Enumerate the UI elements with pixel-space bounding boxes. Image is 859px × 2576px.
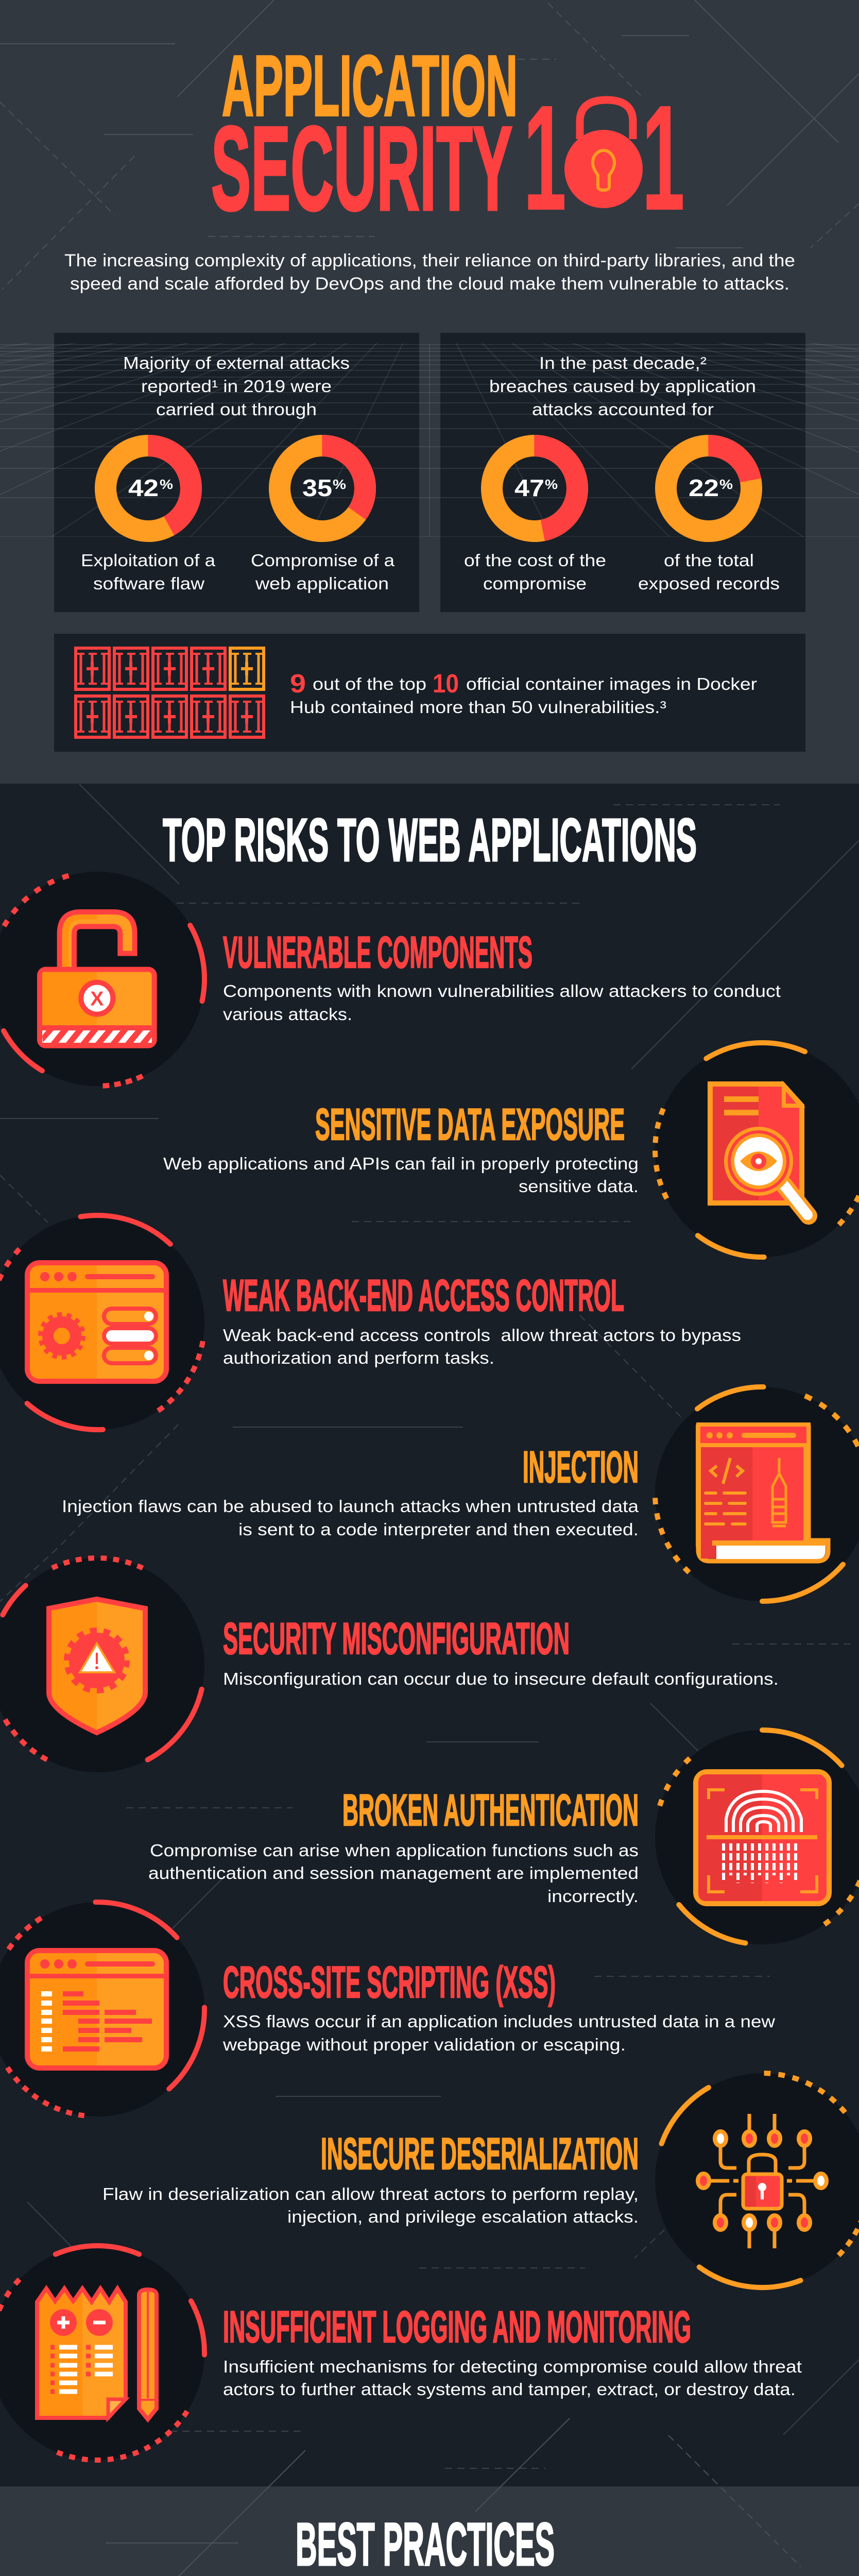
donut chart: 47%: [492, 446, 577, 531]
donut captions: software flaw: [93, 574, 204, 593]
donut captions: exposed records: [638, 574, 780, 593]
container statistic text: 9: [290, 669, 306, 698]
icon: log receipt and pencil: [0, 2205, 246, 2501]
description: XSS flaws occur if an application includes untrusted data in a new: [223, 2012, 775, 2031]
donut chart: 47%: %: [545, 477, 558, 492]
icon: code listing window: [0, 1900, 207, 2119]
donut captions: of the cost of the: [464, 551, 606, 570]
title: SECURITY: [211, 102, 512, 235]
icon: shield with warning gear: [0, 1555, 204, 1772]
description: [163, 1154, 639, 1196]
description: Flaw in deserialization can allow threat actors to perform replay,: [102, 2184, 639, 2204]
description: authentication and session management are implemented: [148, 1863, 639, 1883]
donut chart: 42%: 42: [128, 474, 159, 501]
text: panel 1 heading: reported¹ in 2019 were: [141, 377, 332, 396]
icon: open padlock: [0, 872, 207, 1089]
risk 8: insecure deserialization: [102, 2042, 859, 2319]
donut chart: 22%: %: [719, 477, 733, 492]
container statistic text: Hub contained more than 50 vulnerabilities.³: [290, 698, 666, 717]
donut captions: of the total: [664, 551, 754, 570]
title: 1: [642, 74, 685, 242]
section background: intro: [0, 0, 859, 784]
risk 9: insufficient logging and monitoring: [0, 2243, 802, 2463]
donut chart: 42%: %: [160, 477, 173, 492]
description: Compromise can arise when application functions such as: [150, 1841, 639, 1860]
description: is sent to a code interpreter and then executed.: [238, 1520, 639, 1539]
icon: padlock zero: [564, 100, 643, 208]
text: panel 1 heading: Majority of external attacks: [123, 353, 350, 372]
title: APPLICATION: [222, 38, 518, 134]
description: authorization and perform tasks.: [223, 1348, 494, 1367]
icon: circuit lock: [655, 2071, 859, 2291]
title: [211, 38, 685, 242]
risk 4: injection: [62, 1343, 859, 1646]
section background: top risks: [0, 784, 859, 2486]
risk 1: vulnerable components: VULNERABLE COMPONENTS: [223, 928, 532, 977]
description: Weak back-end access controls allow threat actors to bypass: [223, 1326, 741, 1345]
description: Insufficient mechanisms for detecting compromise could allow threat: [223, 2357, 802, 2376]
text: panel 1 heading: carried out through: [156, 400, 317, 419]
text: panel 1 heading: [123, 353, 350, 419]
description: [102, 2184, 639, 2226]
intro text: The increasing complexity of applications, their reliance on third-party libraries, and the: [64, 251, 795, 270]
description: [222, 2012, 775, 2054]
description: [223, 1326, 741, 1367]
description: [223, 981, 781, 1024]
container statistic text: official container images in Docker: [466, 674, 757, 693]
description: [148, 1841, 639, 1906]
heading: CROSS-SITE SCRIPTING (XSS): [223, 1958, 556, 2007]
risk 2: sensitive data exposure: [163, 1003, 859, 1297]
icon: open padlock: X: [90, 988, 104, 1010]
panel: containers: [54, 634, 805, 752]
donut chart: 35%: [280, 446, 365, 531]
icon: code window and syringe: [652, 1384, 859, 1604]
description: injection, and privilege escalation attacks.: [287, 2207, 639, 2226]
description: Misconfiguration can occur due to insecure default configurations.: [223, 1669, 779, 1688]
risk 5: security misconfiguration: [0, 1520, 779, 1810]
intro text: speed and scale afforded by DevOps and the cloud make them vulnerable to attacks.: [70, 274, 789, 294]
text: panel 2 heading: breaches caused by application: [489, 377, 756, 396]
donut captions: Exploitation of a: [81, 551, 216, 570]
donut chart: 35%: %: [333, 477, 346, 492]
text: panel 2 heading: [489, 353, 756, 419]
donut chart: 42%: [106, 446, 191, 531]
section background: best practices: [0, 2486, 859, 2576]
description: Components with known vulnerabilities allow attackers to conduct: [223, 981, 781, 1001]
donut captions: web application: [255, 574, 389, 593]
icon: settings window: [0, 1213, 205, 1432]
container statistic text: [290, 669, 757, 717]
text: panel 2 heading: attacks accounted for: [532, 400, 714, 419]
container statistic text: out of the top: [313, 674, 426, 693]
callout: real-time protection: [132, 2567, 416, 2576]
risk 3: weak back-end access control: [0, 1191, 741, 1454]
description: webpage without proper validation or escaping.: [222, 2035, 626, 2054]
text: panel 2 heading: In the past decade,²: [539, 353, 707, 372]
description: incorrectly.: [547, 1887, 639, 1906]
donut captions: [81, 551, 780, 593]
intro text: [64, 251, 795, 294]
donut captions: Compromise of a: [251, 551, 395, 570]
description: [223, 2357, 802, 2399]
risk 6: broken authentication: [148, 1696, 859, 1979]
icon: document and magnifier: [652, 1040, 859, 1260]
description: sensitive data.: [519, 1177, 639, 1196]
risk 1: vulnerable components: [0, 832, 781, 1126]
panel: external attacks: [54, 333, 419, 612]
description: Injection flaws can be abused to launch attacks when untrusted data: [62, 1497, 639, 1516]
icon: fingerprint scanner: [655, 1727, 859, 1945]
donut chart: 47%: 47: [514, 474, 544, 501]
description: [62, 1497, 639, 1539]
risk 7: cross-site scripting: [0, 1860, 775, 2158]
description: various attacks.: [223, 1005, 352, 1024]
donut captions: compromise: [483, 574, 587, 593]
donut chart: 22%: 22: [689, 474, 719, 501]
container statistic text: 10: [433, 669, 459, 698]
donut chart: 22%: [666, 446, 751, 531]
icon: shipping containers grid: [76, 648, 264, 737]
title: 1: [523, 74, 566, 242]
risk 4: injection: INJECTION: [523, 1443, 639, 1492]
donut chart: 35%: 35: [302, 474, 332, 501]
description: actors to further attack systems and tamper, extract, or destroy data.: [223, 2380, 796, 2399]
panel: breaches: [440, 333, 805, 612]
description: Web applications and APIs can fail in properly protecting: [163, 1154, 639, 1173]
